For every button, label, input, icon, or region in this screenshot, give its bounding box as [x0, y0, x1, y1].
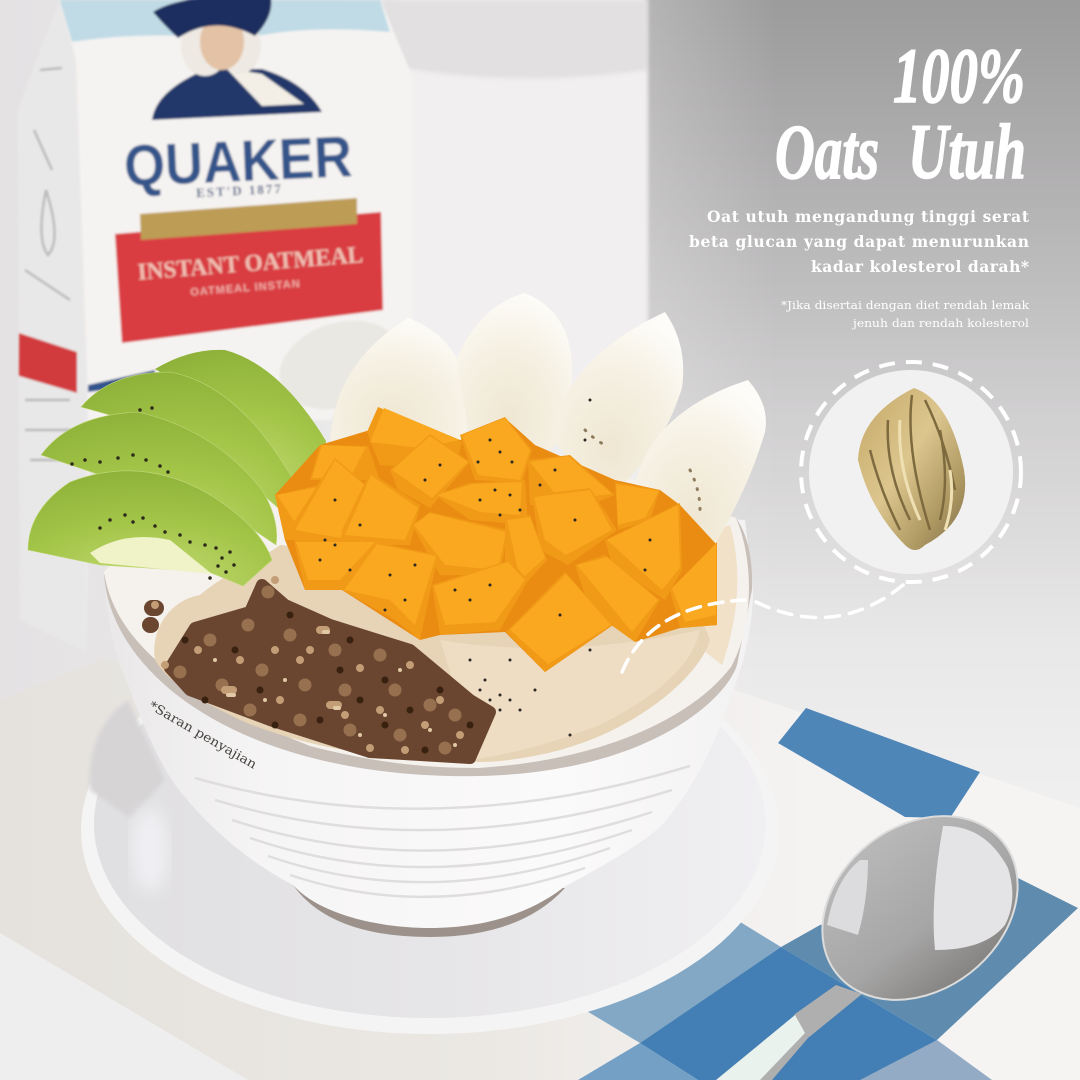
- description text: beta glucan yang dapat menurunkan: [689, 232, 1029, 251]
- red label panel: OATMEAL INSTAN: [190, 278, 301, 299]
- granola: [150, 580, 490, 758]
- spoon handle: [752, 985, 862, 1080]
- milk bottle: [380, 0, 647, 400]
- icon: Quaker man: [152, 0, 322, 120]
- kiwi seeds: [72, 408, 234, 578]
- red label panel: [115, 212, 383, 343]
- footnote: jenuh dan rendah kolesterol: [851, 317, 1030, 330]
- bag side panel markings: [25, 68, 72, 460]
- kiwi core: [90, 537, 212, 574]
- title: Oats: [775, 108, 879, 195]
- icon: oat grain: [858, 388, 965, 550]
- mango cubes: [275, 407, 717, 672]
- dashed pointer line: [622, 585, 903, 672]
- napkin: [0, 660, 1080, 1080]
- plate: [81, 626, 779, 1034]
- title: [775, 32, 1026, 195]
- chia seeds: [320, 400, 650, 735]
- oat grain callout: [801, 362, 1021, 582]
- kiwi slices: [28, 350, 326, 586]
- product: Quaker Instant Oatmeal bag: [18, 0, 412, 652]
- dashed ring: [801, 362, 1021, 582]
- banana slices: [330, 293, 766, 553]
- gold banner: [140, 198, 357, 240]
- callout circle: [809, 370, 1013, 574]
- bowl body: [104, 500, 753, 928]
- footnote: *Jika disertai dengan diet rendah lemak: [781, 299, 1029, 312]
- back kiwi slices: [41, 350, 326, 545]
- title: 100%: [893, 32, 1025, 119]
- description text: Oat utuh mengandung tinggi serat: [707, 207, 1030, 226]
- red label panel: INSTANT OATMEAL: [137, 242, 364, 286]
- footnote: [781, 299, 1030, 330]
- bowl rim: [104, 440, 752, 776]
- note: serving suggestion: *Saran penyajian: [147, 698, 260, 772]
- blue stripes: [578, 708, 1078, 1080]
- est. year: EST'D 1877: [196, 181, 283, 200]
- spoon: [716, 778, 1054, 1080]
- bowl interior wall: [104, 440, 749, 768]
- brand name: QUAKER: [123, 124, 353, 199]
- spoon bowl: [786, 778, 1054, 1038]
- bowl: [104, 440, 753, 937]
- description text: [689, 207, 1030, 276]
- oatmeal: [154, 545, 710, 762]
- bowl base: [293, 885, 565, 937]
- front kiwi slice: [28, 408, 272, 586]
- title: Utuh: [908, 108, 1026, 195]
- description text: kadar kolesterol darah*: [811, 257, 1029, 276]
